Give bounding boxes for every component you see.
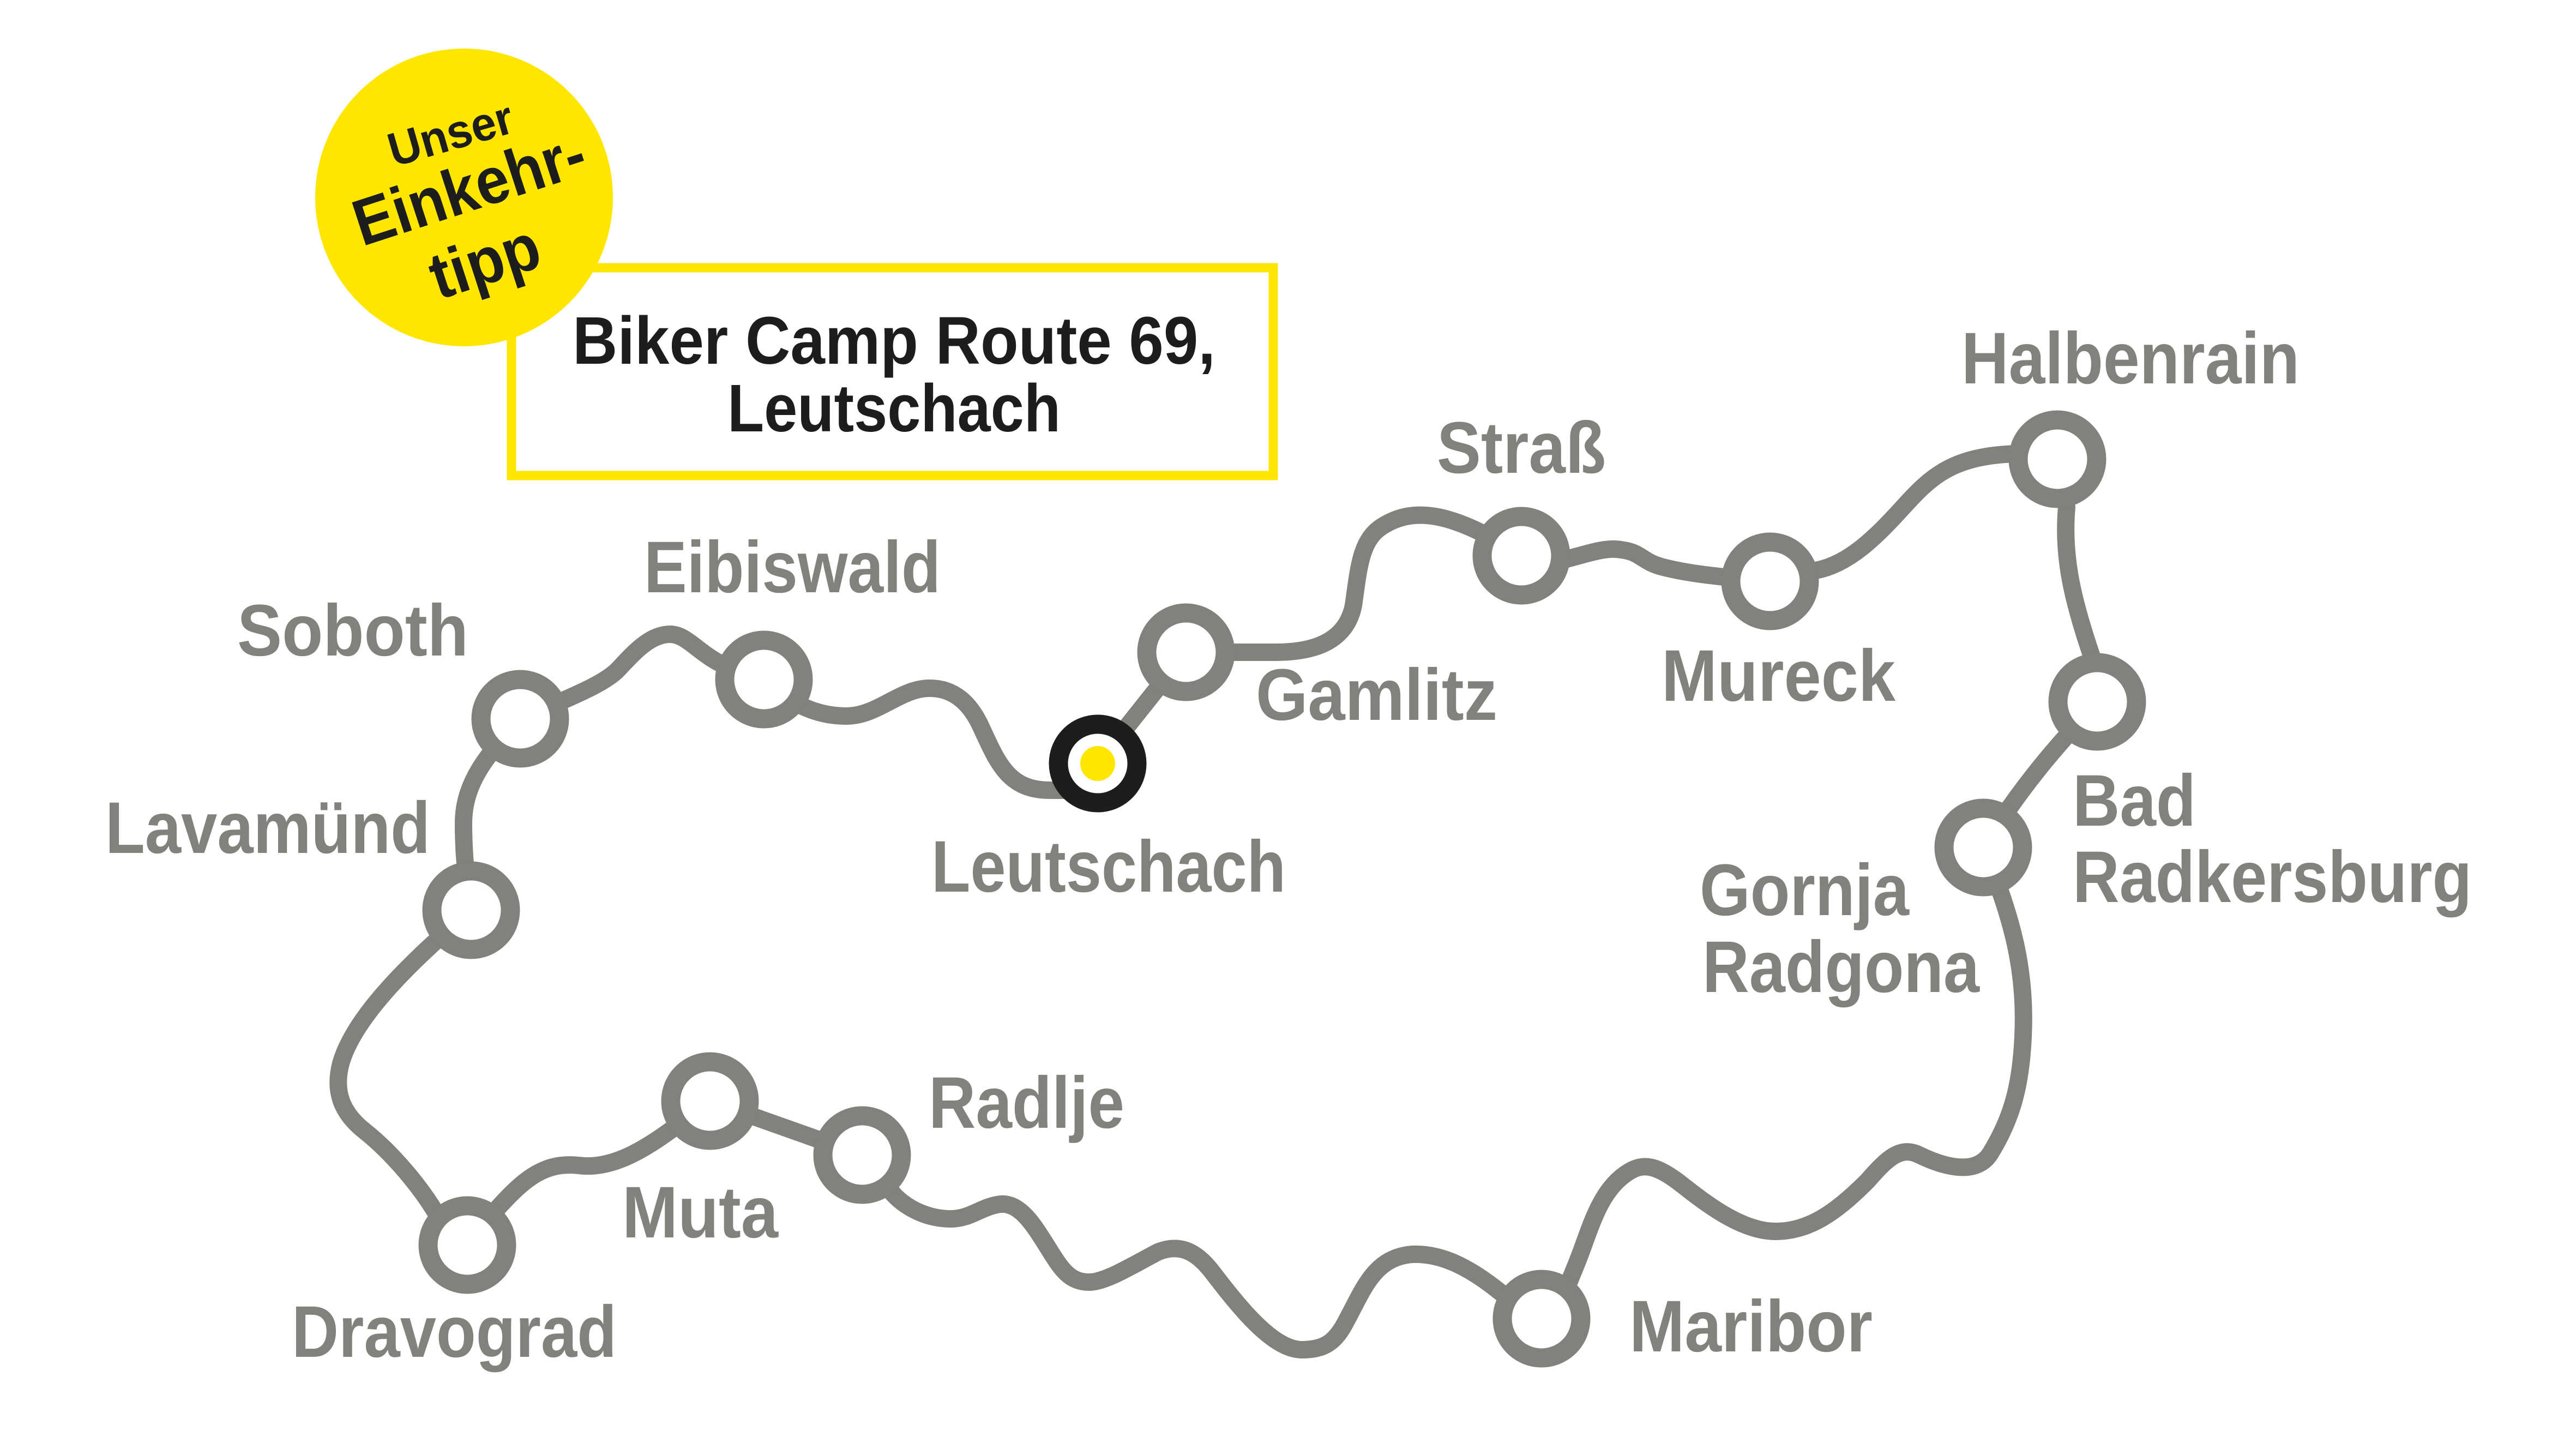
- stop: Maribor: [1502, 1279, 1581, 1358]
- label: Gamlitz: Gamlitz: [1256, 654, 1497, 736]
- callout box: Biker Camp Route 69: [511, 268, 1273, 476]
- stop: Halbenrain: [2018, 420, 2097, 498]
- label: Gornja Radgona: Gornja: [1700, 850, 1910, 931]
- callout text: [573, 304, 1215, 446]
- label: Mureck: Mureck: [1662, 635, 1895, 717]
- label: Gornja Radgona: Radgona: [1702, 927, 1980, 1008]
- label: Muta: Muta: [622, 1172, 779, 1253]
- badge text: Unser: [382, 91, 519, 177]
- stop: Radlje: [823, 1116, 901, 1194]
- badge: Unser Einkehrtipp: [315, 49, 613, 346]
- stop: Soboth: [481, 680, 559, 758]
- stop: Lavamünd: [432, 871, 510, 949]
- label: Bad Radkersburg: Radkersburg: [2073, 837, 2472, 918]
- stop: Gornja Radgona: [1944, 808, 2023, 887]
- label: Radlje: Radlje: [929, 1062, 1124, 1144]
- label: Halbenrain: Halbenrain: [1961, 318, 2300, 399]
- badge text: Einkehr-: [344, 116, 594, 260]
- highlighted stop: Leutschach: [1058, 724, 1137, 803]
- callout text: Leutschach: [727, 371, 1061, 446]
- label: Maribor: Maribor: [1629, 1286, 1873, 1367]
- callout text: Biker Camp Route 69,: [573, 304, 1215, 378]
- badge text: [344, 91, 594, 314]
- label: Eibiswald: Eibiswald: [644, 527, 941, 608]
- label: Straß: Straß: [1437, 407, 1606, 489]
- label: Leutschach: Leutschach: [931, 826, 1286, 907]
- label: Dravograd: Dravograd: [292, 1291, 617, 1373]
- badge text: tipp: [420, 209, 549, 314]
- place labels: [105, 318, 2472, 1373]
- label: Bad Radkersburg: [2073, 760, 2472, 918]
- label: Gornja Radgona: [1700, 850, 1980, 1008]
- route line: [338, 454, 2097, 1350]
- stop: Mureck: [1731, 542, 1809, 621]
- stop: Gamlitz: [1147, 613, 1225, 692]
- route stops: [428, 420, 2136, 1358]
- stop: Muta: [671, 1062, 749, 1140]
- stop: Dravograd: [428, 1206, 507, 1284]
- stop: Bad Radkersburg: [2058, 663, 2136, 741]
- stop: Straß: [1482, 516, 1561, 595]
- label: Bad Radkersburg: Bad: [2073, 760, 2196, 841]
- label: Soboth: Soboth: [237, 590, 468, 671]
- stop: Eibiswald: [725, 640, 803, 719]
- label: Lavamünd: Lavamünd: [105, 787, 430, 869]
